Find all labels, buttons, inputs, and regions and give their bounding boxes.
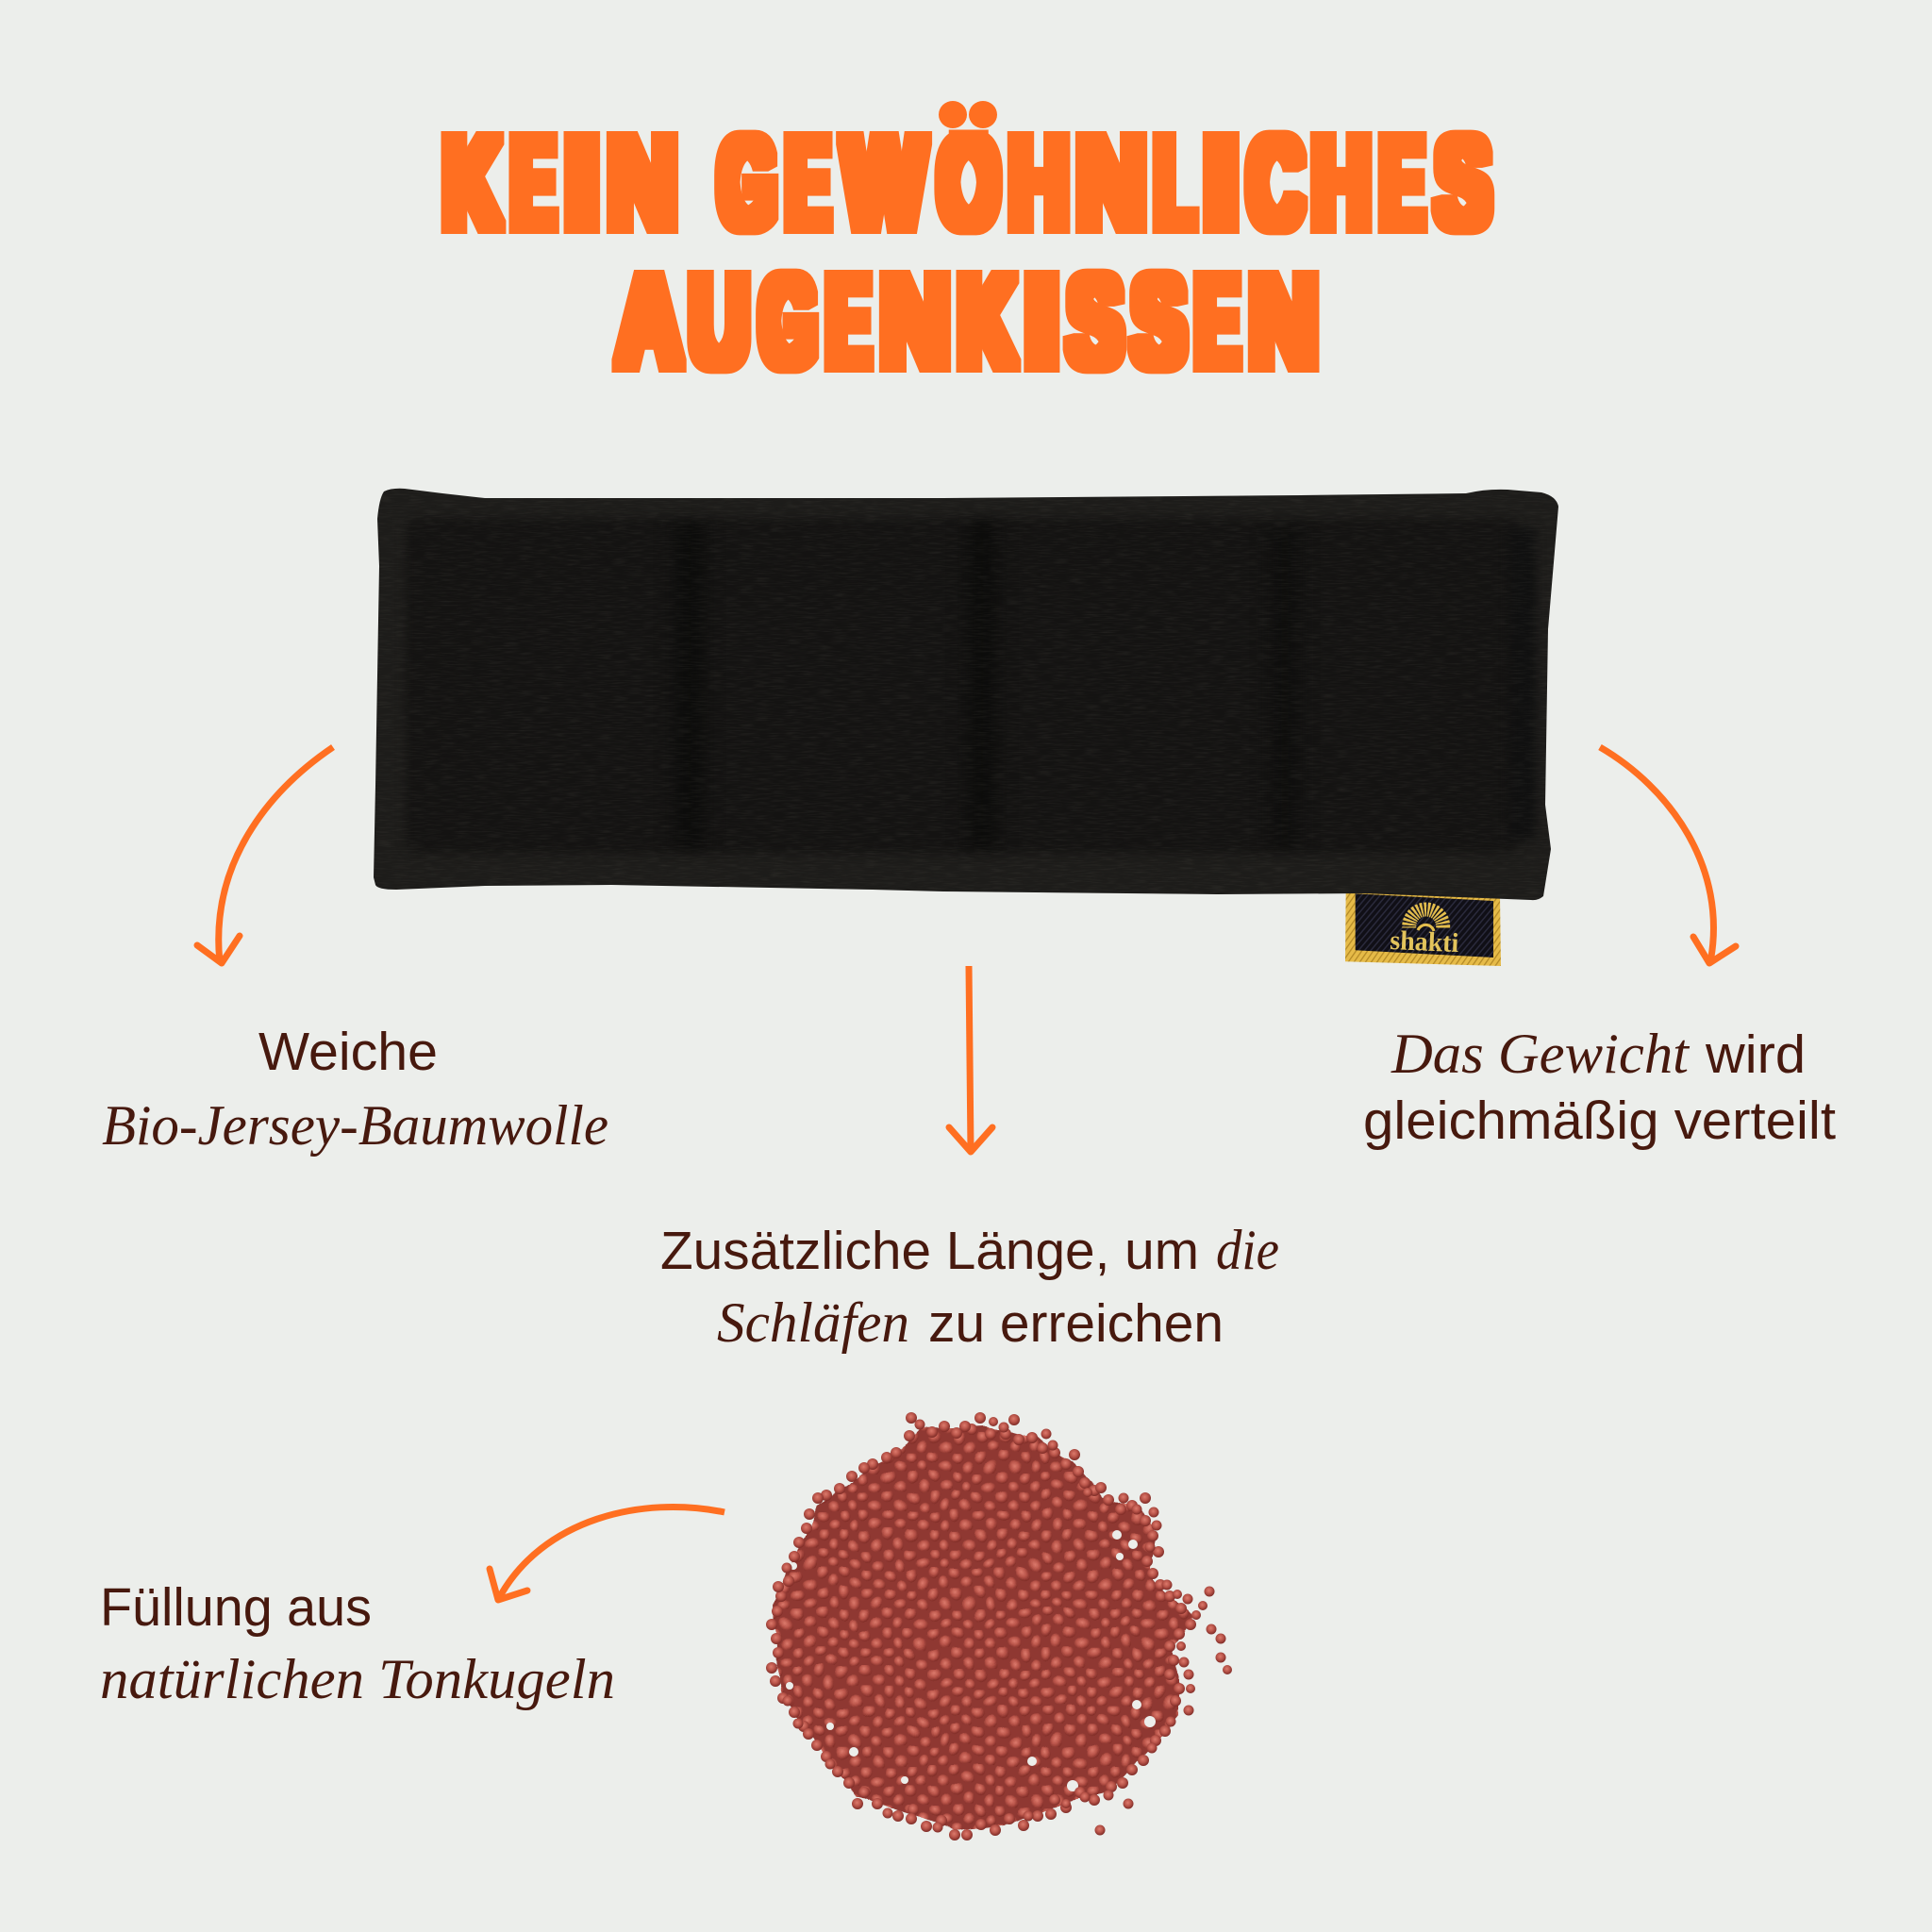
text: filling of natural clay beads: natürlichen Tonkugeln — [100, 1648, 615, 1710]
text: weight evenly distributed — [1363, 1023, 1836, 1151]
title: G — [719, 110, 775, 256]
title: L — [1156, 110, 1194, 256]
arrow: to weight text — [1600, 747, 1736, 963]
title: U — [690, 249, 749, 394]
title: N — [608, 110, 677, 256]
title: A — [617, 249, 681, 394]
title: I — [1200, 110, 1242, 256]
title: I — [561, 110, 602, 256]
title: C — [1248, 110, 1303, 256]
title: E — [512, 110, 555, 256]
text: soft organic jersey cotton: Weiche — [258, 1022, 438, 1082]
arrow: from clay beads to filling text — [490, 1507, 724, 1600]
text: soft organic jersey cotton — [102, 1022, 608, 1157]
title: E — [827, 249, 870, 394]
text: extra length to reach the temples: Schläfen — [717, 1291, 909, 1354]
text: extra length to reach the temples: zu erreichen — [928, 1293, 1224, 1354]
woven label: shakti — [1345, 890, 1501, 966]
title: S — [1436, 110, 1490, 256]
title — [441, 101, 1494, 394]
woven label: shakti: shakti — [1390, 925, 1459, 958]
text: extra length to reach the temples — [660, 1219, 1279, 1354]
title: Ö — [939, 110, 998, 256]
title: E — [1381, 110, 1424, 256]
text: filling of natural clay beads — [100, 1577, 615, 1710]
title: E — [1196, 249, 1238, 394]
text: extra length to reach the temples: die — [1216, 1219, 1279, 1281]
title: G — [760, 249, 816, 394]
text: weight evenly distributed: gleichmäßig verteilt — [1363, 1091, 1836, 1151]
title: I — [1022, 249, 1062, 394]
text: extra length to reach the temples: Zusätzliche Länge, um — [660, 1221, 1199, 1281]
title: H — [1009, 110, 1068, 256]
title: H — [1312, 110, 1370, 256]
text: weight evenly distributed: Das Gewicht — [1391, 1023, 1690, 1085]
text: weight evenly distributed: wird — [1705, 1024, 1806, 1085]
title: S — [1068, 249, 1123, 394]
eye pillow — [368, 481, 1566, 906]
title: N — [1249, 249, 1318, 394]
text: filling of natural clay beads: Füllung aus — [100, 1577, 372, 1638]
title: S — [1132, 249, 1185, 394]
title: K — [958, 249, 1014, 394]
title: K — [443, 110, 499, 256]
clay beads pile — [755, 1406, 1232, 1849]
title: N — [1075, 110, 1146, 256]
title: W — [843, 110, 924, 256]
arrow: to Bio-Jersey-Baumwolle — [197, 747, 333, 963]
arrow: to extra length text — [949, 966, 992, 1152]
title: N — [879, 249, 950, 394]
title: E — [787, 110, 829, 256]
text: soft organic jersey cotton: Bio-Jersey-Baumwolle — [102, 1094, 608, 1157]
